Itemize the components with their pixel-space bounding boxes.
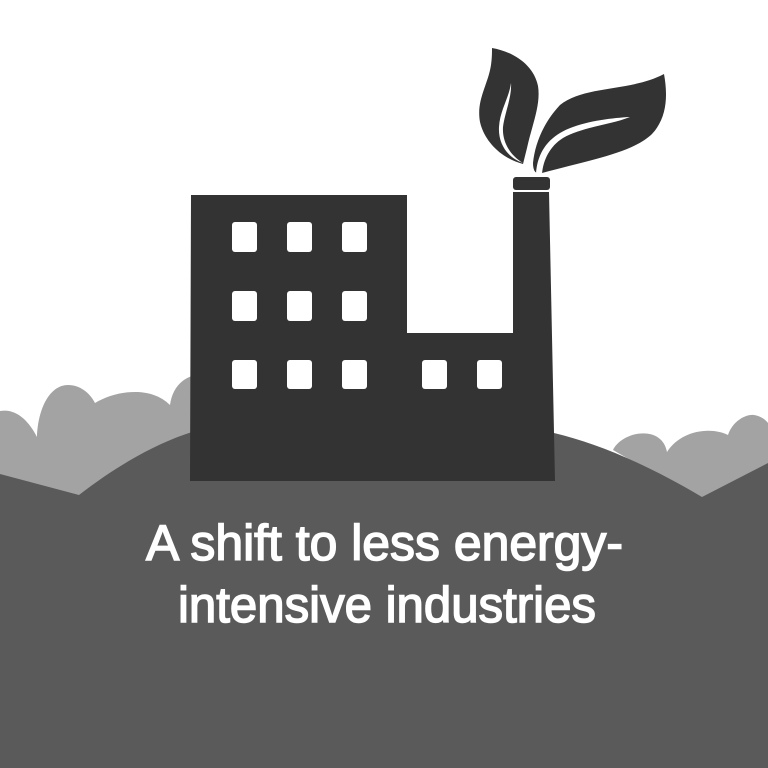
background hills left: [0, 376, 192, 500]
icon: right leaf: [533, 74, 666, 174]
foreground ground: [0, 432, 768, 768]
factory building: [190, 177, 555, 481]
icon: left leaf: [479, 48, 539, 164]
windows: [232, 222, 502, 389]
factory silhouette with chimney: [190, 192, 555, 481]
background hills right: [613, 415, 768, 500]
headline: [146, 515, 623, 633]
headline line 2: intensive industries: [178, 577, 596, 633]
headline line 1: A shift to less energy-: [146, 515, 623, 571]
chimney cap: [513, 177, 550, 190]
